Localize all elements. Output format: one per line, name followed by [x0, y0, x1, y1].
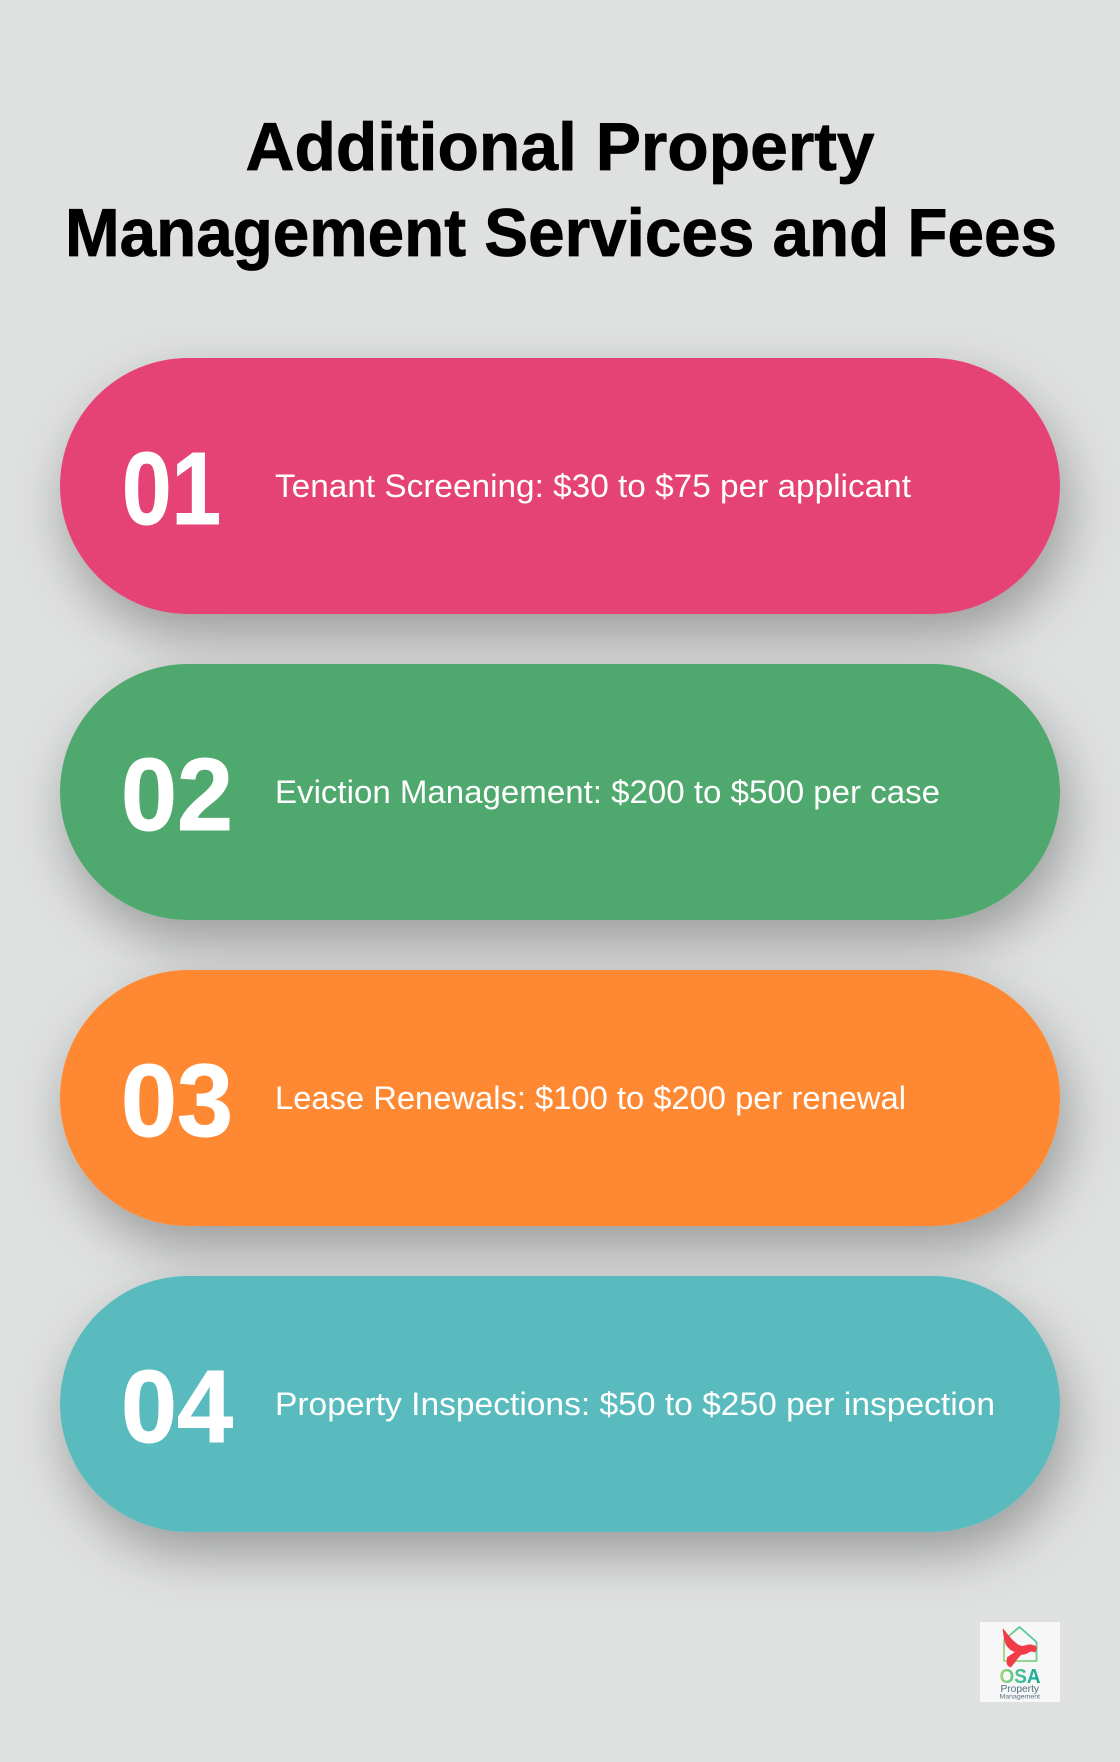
panel: lease renewals — [60, 970, 1060, 1226]
title: Management Services and Fees — [65, 195, 1057, 271]
logo: OSA Property Management — [980, 1622, 1060, 1702]
number 03: 03 — [121, 1043, 233, 1158]
text: property inspections fee: Property Inspections: $50 to $250 per inspection — [275, 1386, 995, 1422]
logo text Management: Management — [1000, 1694, 1040, 1700]
number 04: 04 — [121, 1349, 233, 1464]
text: eviction management fee: Eviction Management: $200 to $500 per case — [275, 774, 940, 810]
pill background 03 — [60, 970, 1060, 1226]
text: lease renewals fee: Lease Renewals: $100 to $200 per renewal — [275, 1080, 906, 1116]
number 01: 01 — [122, 431, 221, 546]
logo text Property: Property — [1000, 1684, 1039, 1695]
pill background 04 — [60, 1276, 1060, 1532]
title: Additional Property — [246, 109, 875, 185]
icon: house outline — [1004, 1627, 1036, 1661]
text: tenant screening fee: Tenant Screening: $30 to $75 per applicant — [275, 468, 911, 504]
number 02: 02 — [121, 737, 233, 852]
title — [65, 109, 1057, 271]
pill background 02 — [60, 664, 1060, 920]
icon: red bird — [1003, 1628, 1037, 1668]
pill background 01 — [60, 358, 1060, 614]
panel: eviction management — [60, 664, 1060, 920]
logo wordmark OSA: OSA — [1000, 1665, 1041, 1688]
panel: tenant screening — [60, 358, 1060, 614]
panel: property inspections — [60, 1276, 1060, 1532]
